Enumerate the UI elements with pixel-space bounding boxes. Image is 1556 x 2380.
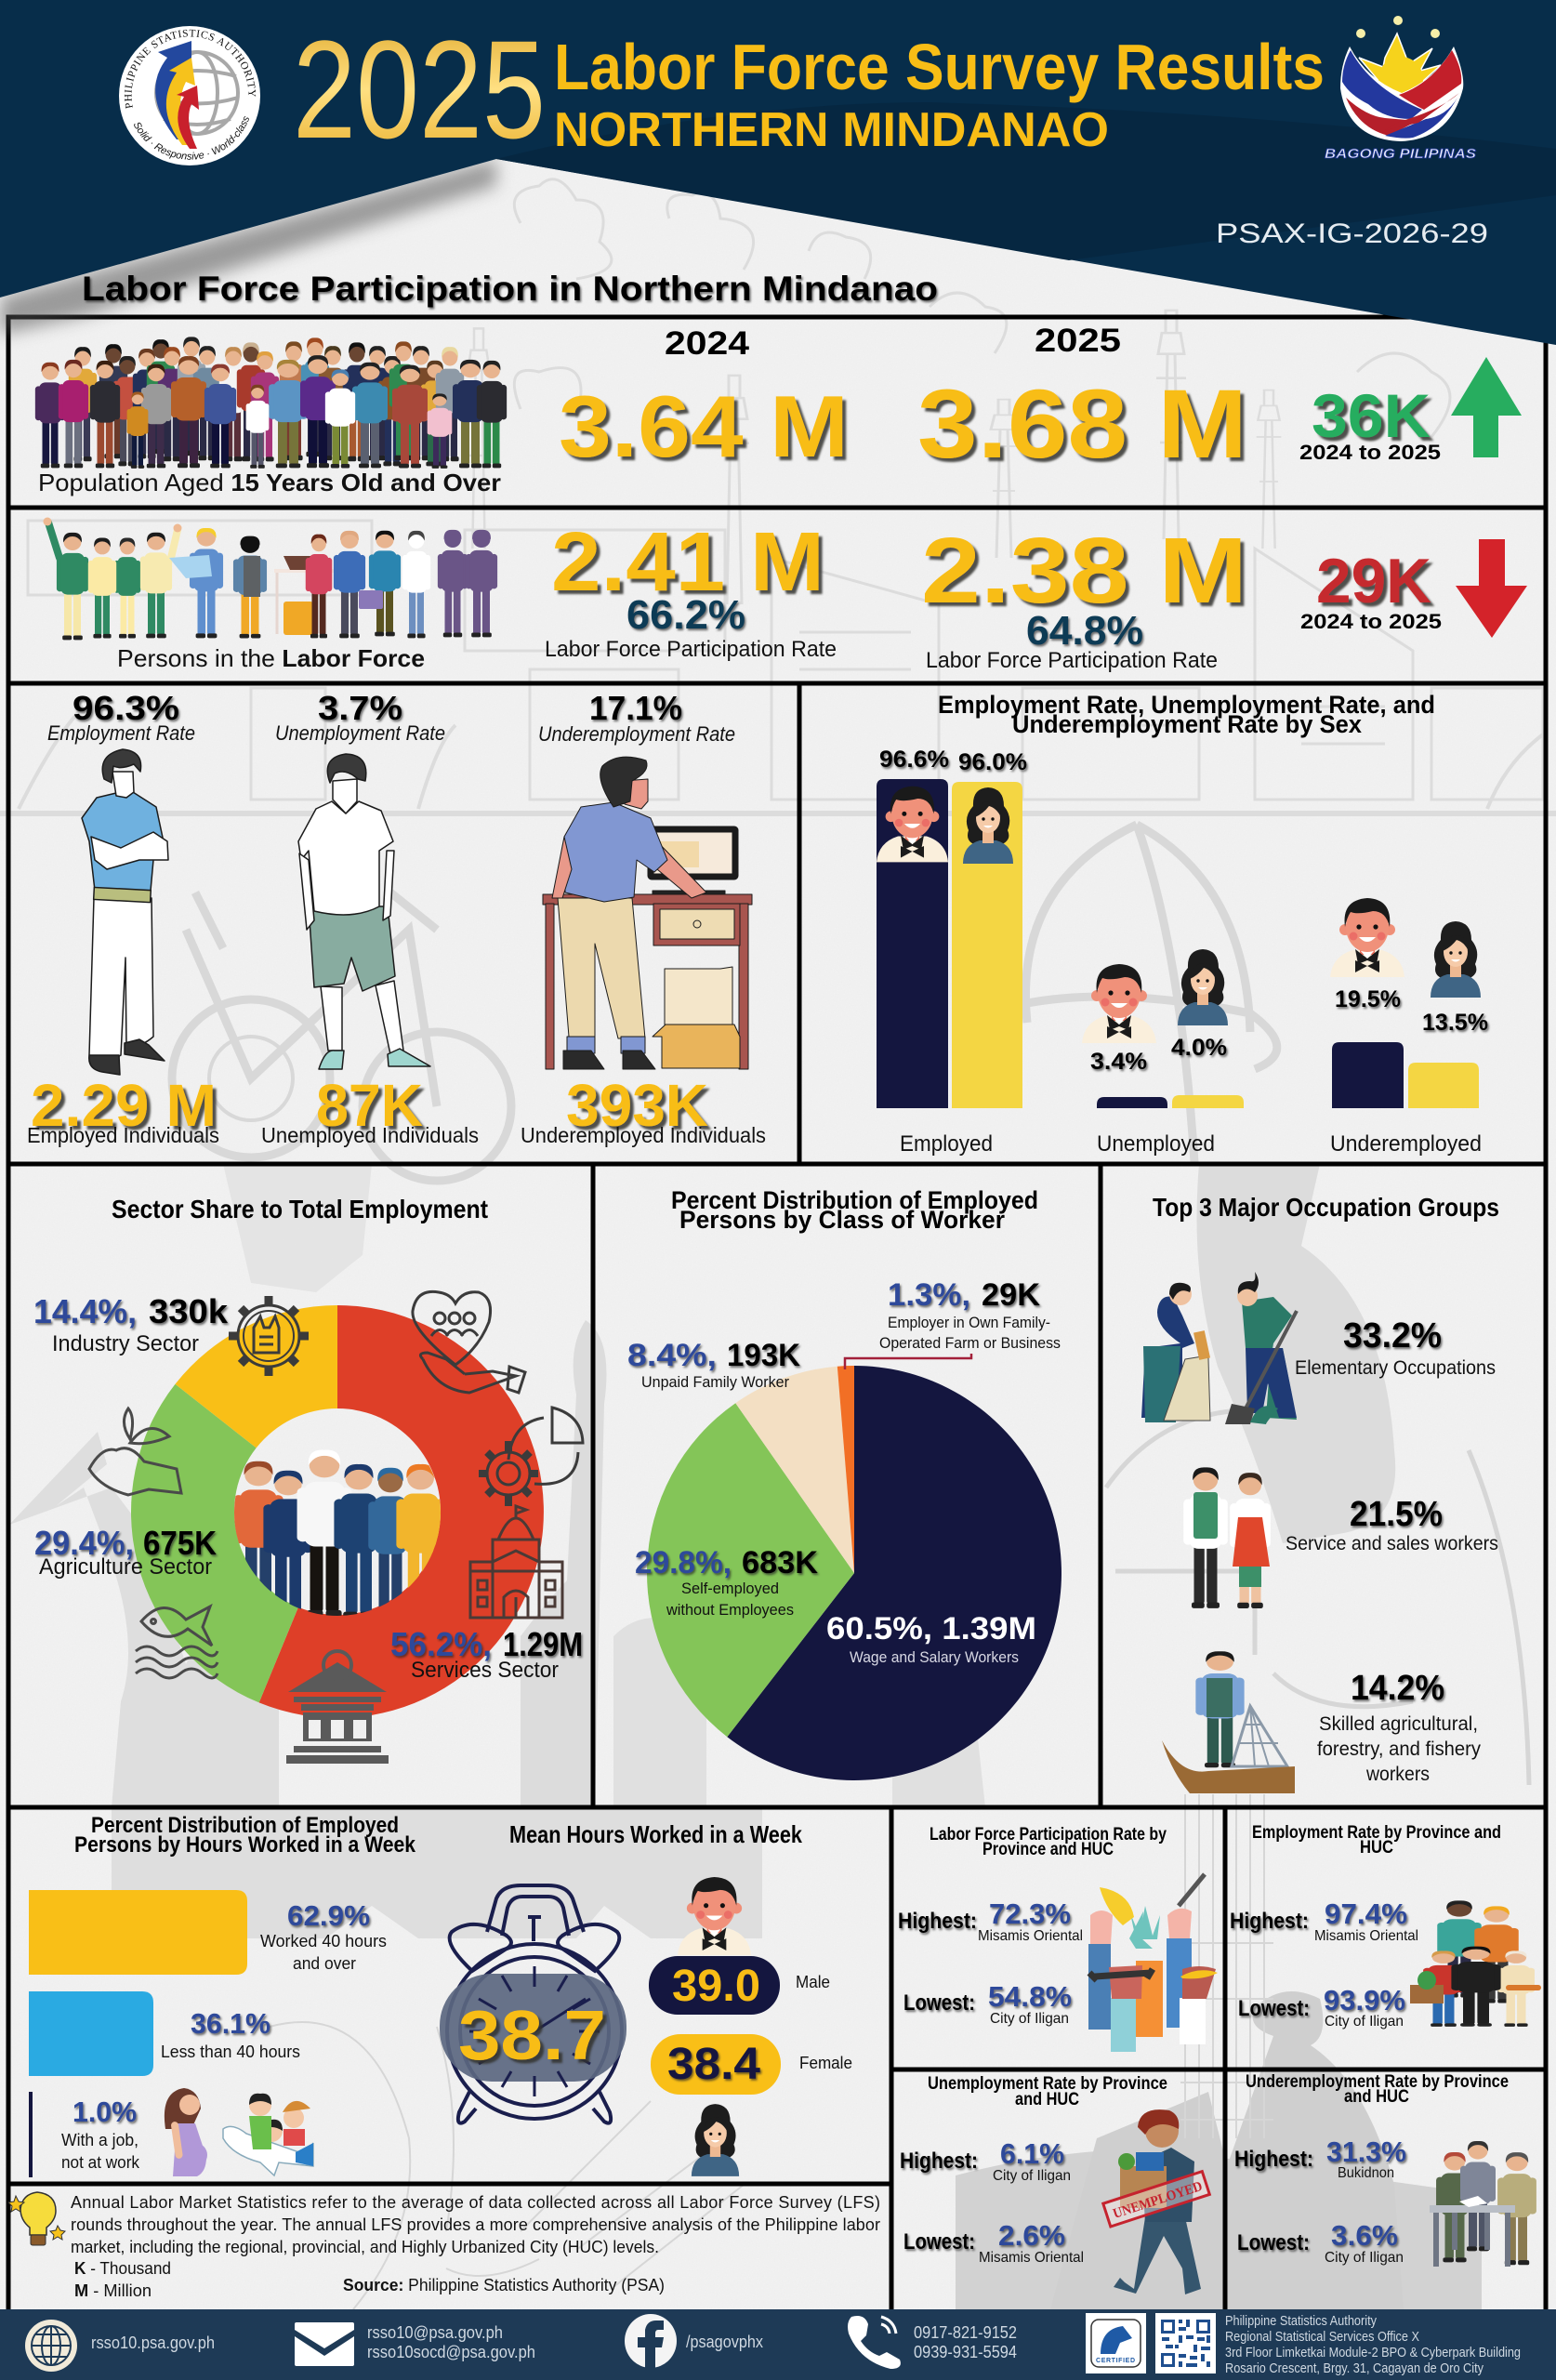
label: unpaid family: 8.4%,: [627, 1338, 717, 1373]
highest: Bukidnon: [1338, 2165, 1394, 2181]
illustration: cleaners: [1141, 1272, 1297, 1424]
logo text: Bagong Pilipinas: BAGONG PILIPINAS: [1325, 146, 1476, 162]
lowest: Lowest:: [903, 1990, 975, 2016]
lowest: 93.9%: [1324, 1984, 1405, 2016]
heading: Province and HUC: [982, 1839, 1114, 1859]
label: 36.1%: 36.1%: [191, 2007, 270, 2040]
unemployment label: Unemployment Rate: [275, 721, 445, 745]
caption: employed: Employed Individuals: [27, 1123, 219, 1147]
highest: Misamis Oriental: [1314, 1928, 1418, 1944]
phone numbers: 0939-931-5594: [914, 2343, 1017, 2361]
heading: Persons by Hours Worked in a Week: [74, 1832, 416, 1858]
document code: PSAX-IG-2026-29: [1216, 218, 1488, 249]
label: 62.9%: 62.9%: [287, 1899, 370, 1932]
highest: Highest:: [1230, 1909, 1309, 1934]
label: unpaid family: [627, 1338, 800, 1391]
label: elementary: Elementary Occupations: [1295, 1357, 1496, 1379]
QR code: [1155, 2313, 1216, 2373]
value labels: 13.5%: [1422, 1010, 1488, 1036]
value 2025: 2.38 M: [921, 519, 1247, 623]
background rebar and leaf lines: [270, 1410, 1529, 2309]
background worker silhouettes: [9, 1164, 1482, 2309]
highest: 97.4%: [1325, 1897, 1407, 1930]
badge: certified: [1086, 2313, 1146, 2373]
panel: unemployment rate by province: [900, 2073, 1209, 2294]
highest: Highest:: [898, 1909, 977, 1934]
value labels: [879, 747, 1488, 1075]
label: 62.9%: [260, 1899, 387, 1973]
icon: bank: [286, 1651, 389, 1764]
heading: Unemployment Rate by Province: [928, 2073, 1167, 2094]
website: rsso10.psa.gov.ph: [91, 2334, 215, 2352]
illustration: service workers: [1183, 1467, 1271, 1608]
illustration: pregnant woman: [165, 2088, 207, 2176]
panel: population 15 and over: [35, 323, 1522, 496]
heading: Underemployment Rate by Province: [1246, 2071, 1509, 2092]
label: wage and salary: [826, 1611, 1036, 1666]
label: agriculture: Agriculture Sector: [39, 1554, 212, 1580]
label: wage and salary: Wage and Salary Workers: [850, 1648, 1019, 1666]
icon: alarm clock with mean value: [440, 1885, 626, 2123]
label: self-employed: 29.8%,: [635, 1545, 732, 1580]
logo: Philippine Statistics Authority: Solid · Responsive · World-class: [134, 116, 249, 160]
label: 1.0%: With a job,: [61, 2131, 138, 2149]
heading: 2025: 2025: [293, 11, 546, 167]
label: unpaid family: 193K: [727, 1338, 800, 1373]
heading: Labor Force Survey Results: Labor Force Survey Results: [554, 31, 1325, 103]
lowest: 2.6%: [998, 2219, 1065, 2252]
highest: 31.3%: [1326, 2135, 1406, 2168]
underemployment rate: 17.1%: [589, 689, 682, 727]
value 2024: 3.64 M: [559, 377, 849, 475]
label: self-employed: [635, 1545, 818, 1619]
lowest: 54.8%: [988, 1980, 1072, 2013]
highest: [900, 2137, 1071, 2184]
lowest: City of Iligan: [1325, 2014, 1404, 2030]
lowest: Lowest:: [903, 2229, 975, 2254]
illustration: underemployed man at desk: [543, 757, 752, 1069]
change value: 29K: [1316, 546, 1431, 616]
icon: down arrow: [1456, 539, 1527, 638]
change period: 2024 to 2025: [1299, 441, 1441, 464]
year 2024: 2024: [665, 325, 750, 362]
value labels: 19.5%: [1335, 986, 1401, 1012]
caption: unemployed: Unemployed Individuals: [261, 1123, 479, 1147]
label: agriculture: 675K: [143, 1524, 217, 1562]
section title: Labor Force Participation in Northern Mindanao: [82, 270, 938, 308]
donut chart: [131, 1305, 544, 1718]
label: agricultural: Skilled agricultural,: [1319, 1713, 1478, 1735]
highest: Highest:: [900, 2149, 978, 2174]
label: 1.0%: 1.0%: [73, 2096, 137, 2128]
panel: hours worked: [29, 1813, 852, 2177]
value: service: 21.5%: [1350, 1495, 1443, 1534]
label: industry: 330k: [149, 1292, 229, 1330]
illustration: raised hands with tools: [1088, 1874, 1218, 2052]
label: self-employed: Self-employed: [681, 1580, 779, 1597]
employment rate: 96.3%: [73, 689, 179, 727]
label: employer: Employer in Own Family-: [888, 1314, 1050, 1331]
label: wage and salary: 60.5%, 1.39M: [826, 1611, 1036, 1646]
panel: sector share: [33, 1195, 583, 1764]
heading: HUC: [1360, 1837, 1393, 1858]
heading: Top 3 Major Occupation Groups: [1153, 1193, 1499, 1222]
illustration: workers in various jobs: [43, 517, 497, 640]
illustration: unemployed man with box: UNEMPLOYED: [1112, 2179, 1205, 2222]
phone numbers: 0917-821-9152: [914, 2323, 1017, 2342]
source: Source: Philippine Statistics Authority (PSA): [343, 2276, 665, 2294]
count: employed: 2.29 M: [31, 1072, 217, 1139]
icon: facebook: [625, 2314, 677, 2368]
heading: Employment Rate, Unemployment Rate, and: [938, 691, 1435, 719]
label: agriculture: [34, 1524, 217, 1580]
bar: less than 40 hours: [29, 1991, 153, 2076]
icon: light bulb: [8, 2192, 65, 2245]
value labels: 4.0%: [1171, 1035, 1227, 1061]
rate label 2025: Labor Force Participation Rate: [926, 648, 1218, 673]
lowest: 3.6%: [1331, 2219, 1398, 2252]
lowest: City of Iligan: [990, 2011, 1069, 2027]
illustration: employed man: [82, 749, 168, 1075]
pill: female mean hours: 38.4: [667, 2040, 760, 2089]
icon: government building: [470, 1506, 562, 1618]
label: agricultural: [1317, 1713, 1481, 1785]
leader line: [845, 1354, 971, 1369]
panel: employed, unemployed, underemployed individuals: [27, 689, 766, 1147]
illustration: group of workers: [1410, 1900, 1541, 2027]
heading: mean hours: Mean Hours Worked in a Week: [509, 1820, 802, 1848]
icon: phone: [848, 2316, 901, 2369]
panel: LFPR by province: [898, 1824, 1218, 2052]
label: employer: [879, 1277, 1061, 1352]
category labels: Underemployed: [1330, 1131, 1482, 1157]
label: services: 56.2%,: [390, 1625, 492, 1663]
phone numbers: [914, 2323, 1017, 2361]
value: elementary: 33.2%: [1343, 1316, 1442, 1355]
portrait: female: [692, 2104, 739, 2176]
office address: Rosario Crescent, Brgy. 31, Cagayan de Oro City: [1225, 2361, 1484, 2376]
lowest: [1237, 2219, 1404, 2266]
heading: Underemployment Rate by Sex: [1012, 710, 1362, 738]
highest: City of Iligan: [993, 2168, 1071, 2184]
panel: rates by sex: [877, 691, 1488, 1157]
footer band: [0, 2309, 1556, 2380]
label: male: Male: [796, 1973, 830, 1991]
header navy banner: [0, 0, 1556, 345]
email addresses: rsso10@psa.gov.ph: [367, 2323, 503, 2342]
label: services: [390, 1625, 583, 1683]
label: industry: [33, 1292, 229, 1356]
highest: Highest:: [1234, 2147, 1313, 2172]
pill: male mean hours: 39.0: [672, 1962, 760, 2011]
lowest: [903, 2219, 1084, 2266]
icon: pie chart and gear: [479, 1408, 583, 1506]
office address: [1225, 2314, 1521, 2376]
lowest: City of Iligan: [1325, 2250, 1404, 2266]
highest: Misamis Oriental: [978, 1928, 1083, 1944]
illustration: unemployed man: [298, 754, 430, 1069]
count: unemployed: 87K: [316, 1072, 423, 1139]
value labels: 96.6%: [879, 747, 949, 773]
rate label 2024: Labor Force Participation Rate: [545, 637, 837, 662]
heading: Labor Force Participation Rate by: [930, 1824, 1167, 1844]
background line art and silhouettes: [0, 179, 1556, 1181]
illustration: crowd of people: [35, 337, 507, 469]
label: 36.1%: Less than 40 hours: [161, 2043, 300, 2061]
logo: Bagong Pilipinas: [1340, 16, 1463, 141]
abbreviation key: [74, 2259, 171, 2300]
label: industry: Industry Sector: [52, 1331, 199, 1356]
portrait: male: [678, 1877, 751, 1955]
value labels: 96.0%: [958, 749, 1027, 775]
abbreviation key: K - Thousand: [74, 2259, 171, 2278]
bar chart by sex: [877, 779, 1481, 1108]
label: 1.0%: not at work: [61, 2153, 140, 2172]
facebook handle: /psagovphx: [686, 2333, 763, 2351]
label: agriculture: 29.4%,: [34, 1524, 134, 1562]
lowest: [903, 1980, 1072, 2027]
heading: and HUC: [1344, 2086, 1409, 2107]
change period: 2024 to 2025: [1300, 610, 1442, 633]
underemployment label: Underemployment Rate: [538, 722, 735, 746]
icon: up arrow: [1451, 357, 1522, 457]
email addresses: [367, 2323, 535, 2361]
pie chart: [647, 1366, 1062, 1780]
category labels: [900, 1131, 1482, 1157]
illustration: family on airplane: [223, 2094, 313, 2175]
category labels: Unemployed: [1097, 1131, 1215, 1157]
note text: rounds throughout the year. The annual LFS provides a more comprehensive analysis of the Philippine labor: [71, 2215, 880, 2234]
count: underemployed: 393K: [566, 1072, 708, 1139]
highest: [1234, 2135, 1406, 2181]
heading: Employment Rate by Province and: [1252, 1822, 1501, 1843]
logo: Philippine Statistics Authority: [119, 26, 260, 165]
email addresses: rsso10socd@psa.gov.ph: [367, 2343, 535, 2361]
heading: and HUC: [1015, 2089, 1079, 2109]
label: unpaid family: Unpaid Family Worker: [641, 1373, 789, 1391]
label: 62.9%: Worked 40 hours: [260, 1932, 387, 1950]
icon: soil in hand: [89, 1408, 181, 1495]
label: 62.9%: and over: [293, 1954, 356, 1973]
caption: underemployed: Underemployed Individuals: [521, 1123, 766, 1147]
panel: note and source: [8, 2192, 880, 2300]
lowest: [1238, 1984, 1405, 2030]
change value: 36K: [1312, 381, 1431, 450]
heading: Percent Distribution of Employed: [671, 1186, 1038, 1214]
label: service: Service and sales workers: [1286, 1533, 1498, 1554]
value 2024: 2.41 M: [551, 516, 824, 609]
year 2025: 2025: [1035, 323, 1121, 359]
icon: fish and waves: [136, 1606, 218, 1678]
caption: Persons in the Labor Force: [117, 644, 425, 672]
illustration: unemployed man with box: [1103, 2109, 1209, 2294]
rate 2024: 66.2%: [626, 592, 745, 638]
pill: male mean hours: [649, 1956, 780, 2015]
panel: class of worker: [627, 1186, 1062, 1780]
abbreviation key: M - Million: [74, 2281, 152, 2300]
icon: factory gear: [229, 1296, 309, 1376]
heading: Sector Share to Total Employment: [112, 1195, 488, 1223]
rate 2025: 64.8%: [1026, 608, 1143, 654]
bar: with a job not at work: [29, 2092, 33, 2177]
panel: underemployment rate by province: [1234, 2071, 1536, 2267]
illustration: colleagues at table: [1430, 2141, 1536, 2267]
label: services: 1.29M: [503, 1625, 583, 1663]
value 2025: 3.68 M: [917, 370, 1247, 479]
caption: Population Aged 15 Years Old and Over: [38, 469, 501, 496]
label: employer: 29K: [982, 1277, 1040, 1313]
value: 38.7: [458, 1996, 606, 2074]
label: self-employed: 683K: [742, 1545, 818, 1580]
icon: globe: [25, 2320, 77, 2372]
label: employer: Operated Farm or Business: [879, 1334, 1061, 1352]
label: 1.0%: [61, 2096, 140, 2172]
office address: Philippine Statistics Authority: [1225, 2314, 1378, 2329]
highest: 6.1%: [1000, 2137, 1064, 2170]
heading: Persons by Class of Worker: [679, 1206, 1005, 1234]
office address: Regional Statistical Services Office X: [1225, 2330, 1419, 2345]
badge: certified: CERTIFIED: [1096, 2358, 1135, 2364]
icon: envelope: [295, 2322, 354, 2366]
employment label: Employment Rate: [47, 721, 195, 745]
note text: Annual Labor Market Statistics refer to the average of data collected across all Labor Force Survey (LFS): [71, 2193, 880, 2212]
pill: female mean hours: [651, 2034, 781, 2095]
panel: top 3 occupation groups: [1141, 1193, 1499, 1793]
label: agricultural: workers: [1365, 1764, 1430, 1785]
category labels: Employed: [900, 1131, 993, 1157]
heading: Northern Mindanao: NORTHERN MINDANAO: [554, 103, 1109, 157]
label: industry: 14.4%,: [33, 1292, 137, 1330]
lowest: Lowest:: [1237, 2230, 1310, 2255]
unemployment rate: 3.7%: [318, 689, 402, 727]
heading: Percent Distribution of Employed: [91, 1813, 399, 1838]
label: 36.1%: [161, 2007, 300, 2061]
illustration: workers in donut centre: [233, 1450, 445, 1620]
highest: [1230, 1897, 1418, 1944]
label: employer: 1.3%,: [888, 1277, 970, 1313]
bar: 40 hours and over: [29, 1890, 247, 1975]
note text: market, including the regional, provincial, and Highly Urbanized City (HUC) levels.: [71, 2238, 659, 2256]
lowest: Lowest:: [1238, 1996, 1310, 2021]
highest: 72.3%: [989, 1897, 1071, 1930]
highest: [898, 1897, 1083, 1944]
illustration: fisherman on boat: [1162, 1651, 1295, 1793]
label: services: Services Sector: [411, 1658, 559, 1683]
lowest: Misamis Oriental: [979, 2250, 1084, 2266]
label: female: Female: [799, 2054, 852, 2072]
label: self-employed: without Employees: [666, 1601, 794, 1619]
value labels: 3.4%: [1090, 1049, 1147, 1075]
value: agricultural: 14.2%: [1351, 1669, 1444, 1708]
office address: 3rd Floor Limketkai Module-2 BPO & Cyberpark Building: [1225, 2346, 1521, 2360]
note text: [71, 2193, 880, 2256]
panel: employment rate by province: [1230, 1822, 1541, 2030]
label: agricultural: forestry, and fishery: [1317, 1739, 1481, 1760]
icon: heart in hand: [413, 1291, 525, 1393]
logo: Philippine Statistics Authority: PHILIPPINE STATISTICS AUTHORITY: [125, 30, 257, 109]
panel: persons in the labor force: [43, 516, 1527, 673]
